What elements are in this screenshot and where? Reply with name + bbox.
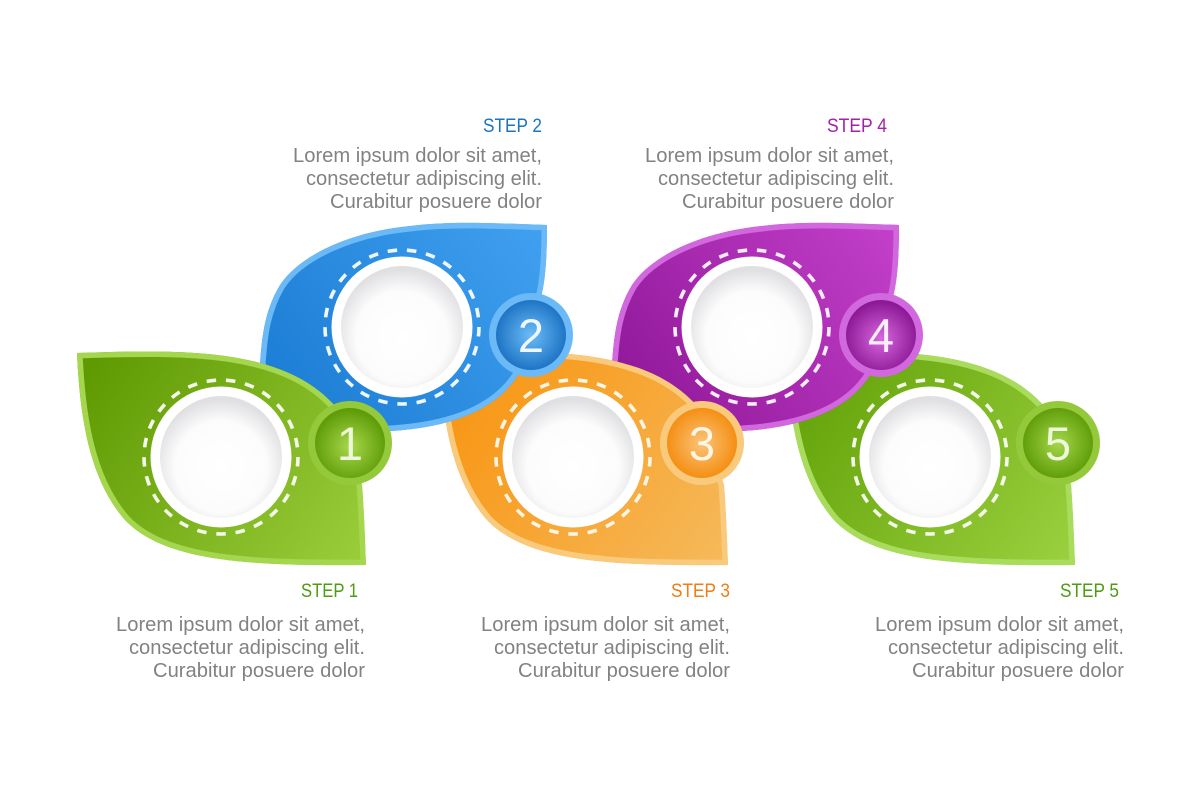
- badge 4: [839, 293, 923, 377]
- dashed ring 3: [496, 380, 650, 534]
- white disc 2: [332, 256, 472, 398]
- body: step 2: Curabitur posuere dolor: [330, 191, 542, 213]
- leaf shape 4: [612, 223, 899, 432]
- body: step 5: Lorem ipsum dolor sit amet,: [875, 614, 1124, 636]
- text block: step 3: [481, 581, 730, 682]
- badge 5: 5: [1045, 417, 1071, 470]
- text block: step 4: [645, 116, 894, 213]
- white disc 3: [502, 386, 644, 528]
- panel: step 4 leaf: [612, 223, 899, 432]
- text block: step 2: [293, 116, 542, 213]
- white disc 1: [150, 386, 292, 528]
- white disc 5: [860, 386, 1000, 528]
- badge 1: 1: [337, 417, 363, 470]
- body: step 3: Lorem ipsum dolor sit amet,: [481, 614, 730, 636]
- heading: step 2: STEP 2: [483, 116, 542, 137]
- badge 4: 4: [868, 309, 894, 362]
- heading: step 5: STEP 5: [1060, 581, 1119, 602]
- leaf shape 5: [786, 351, 1075, 565]
- body: step 3: consectetur adipiscing elit.: [494, 637, 730, 659]
- body: step 2: consectetur adipiscing elit.: [306, 168, 542, 190]
- body: step 4: consectetur adipiscing elit.: [658, 168, 894, 190]
- heading: step 3: STEP 3: [671, 581, 730, 602]
- body: step 5: Curabitur posuere dolor: [912, 660, 1124, 682]
- body: step 4: [645, 145, 894, 213]
- badge 3: 3: [689, 417, 715, 470]
- body: step 1: [116, 614, 365, 682]
- text block: step 1: [116, 581, 365, 682]
- body: step 1: consectetur adipiscing elit.: [129, 637, 365, 659]
- heading: step 4: STEP 4: [827, 116, 887, 137]
- panel: step 5 leaf: [786, 351, 1075, 565]
- white disc 4: [682, 256, 822, 398]
- badge 2: 2: [518, 309, 544, 362]
- body: step 5: consectetur adipiscing elit.: [888, 637, 1124, 659]
- body: step 4: Lorem ipsum dolor sit amet,: [645, 145, 894, 167]
- body: step 1: Curabitur posuere dolor: [153, 660, 365, 682]
- leaf shape 2: [260, 223, 547, 432]
- badge 2: [489, 293, 573, 377]
- leaf shape 3: [439, 351, 728, 565]
- body: step 2: [293, 145, 542, 213]
- panel: step 2 leaf: [260, 223, 547, 432]
- body: step 4: Curabitur posuere dolor: [682, 191, 894, 213]
- dashed ring 4: [675, 250, 829, 404]
- badge 5: [1016, 401, 1100, 485]
- dashed ring 1: [144, 380, 298, 534]
- badge 3: [660, 401, 744, 485]
- body: step 3: Curabitur posuere dolor: [518, 660, 730, 682]
- body: step 1: Lorem ipsum dolor sit amet,: [116, 614, 365, 636]
- heading: step 1: STEP 1: [301, 581, 358, 602]
- dashed ring 5: [853, 380, 1007, 534]
- badge 1: [308, 401, 392, 485]
- body: step 3: [481, 614, 730, 682]
- leaf shape 1: [77, 351, 366, 565]
- panel: step 3 leaf: [439, 351, 728, 565]
- text block: step 5: [875, 581, 1124, 682]
- dashed ring 2: [325, 250, 479, 404]
- panel: step 1 leaf: [77, 351, 366, 565]
- body: step 5: [875, 614, 1124, 682]
- body: step 2: Lorem ipsum dolor sit amet,: [293, 145, 542, 167]
